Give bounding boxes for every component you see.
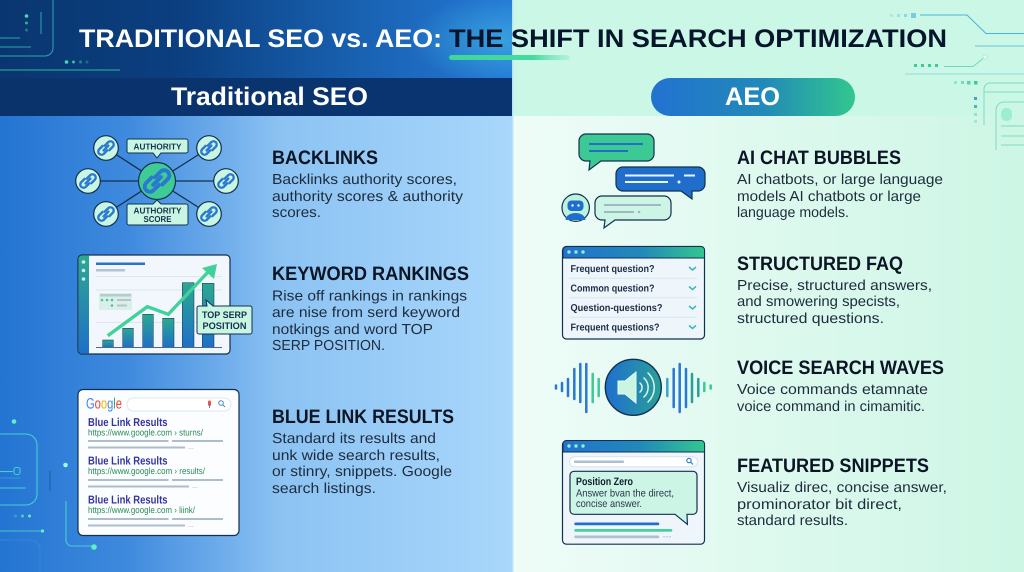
text: blue link results description xyxy=(272,431,452,497)
icon: link network: SCORE xyxy=(144,214,172,224)
text: AI chat description xyxy=(737,172,943,221)
text: featured snippets description: prominorator bit direct, xyxy=(737,497,902,513)
section: AI chat bubbles xyxy=(562,134,943,228)
icon: FAQ window: Common question? xyxy=(570,284,654,294)
text: blue link results description: Standard its results and xyxy=(272,431,436,447)
text: featured snippets description: standard results. xyxy=(737,513,848,529)
header: AEO pill: AEO xyxy=(725,83,780,111)
icon: search results page: Google xyxy=(86,396,122,412)
icon: FAQ window: Frequent questions? xyxy=(570,322,660,334)
heading: structured FAQ: STRUCTURED FAQ xyxy=(737,253,903,275)
icon: ranking chart: POSITION xyxy=(202,321,247,332)
icon: link network: AUTHORITY xyxy=(134,142,182,152)
icon: position zero window xyxy=(562,440,704,544)
left circuit decoration top xyxy=(0,0,120,95)
icon: search results page: https://www.google.com › liink/ xyxy=(88,505,195,515)
section: structured FAQ xyxy=(562,246,932,339)
icon: ranking chart: TOP SERP xyxy=(202,310,248,321)
text: backlinks description xyxy=(272,172,464,221)
section: featured snippets xyxy=(562,440,947,544)
right panel background xyxy=(512,0,1024,572)
heading: blue link results: BLUE LINK RESULTS xyxy=(272,406,454,428)
heading: keyword rankings: KEYWORD RANKINGS xyxy=(272,263,469,285)
title underline xyxy=(449,55,570,60)
icon: search results page: Blue Link Results xyxy=(88,494,168,506)
icon: search results page: ... xyxy=(188,522,194,529)
section: backlinks xyxy=(76,136,464,226)
icon: search results page: ... xyxy=(188,444,194,451)
icon: position zero window: Position Zero xyxy=(576,476,633,488)
icon: position zero window: concise answer. xyxy=(576,498,642,510)
text: structured FAQ description: and smowering specists, xyxy=(737,294,900,310)
text: structured FAQ description: Precise, structured answers, xyxy=(737,278,932,294)
heading: AI chat bubbles: AI CHAT BUBBLES xyxy=(737,147,901,169)
text: structured FAQ description: structured questions. xyxy=(737,311,884,327)
icon: link network xyxy=(76,136,238,226)
icon: search results page xyxy=(78,390,239,536)
header: Traditional SEO: Traditional SEO xyxy=(171,83,368,111)
icon: chat bubbles and robot xyxy=(562,134,705,228)
icon: search results page: Blue Link Results xyxy=(88,417,168,429)
header: Traditional SEO xyxy=(0,78,512,116)
icon: search results page: ... xyxy=(192,483,198,490)
heading: backlinks: BACKLINKS xyxy=(272,147,378,169)
icon: ranking chart xyxy=(78,255,252,354)
right circuit decoration xyxy=(890,13,1024,150)
text: keyword rankings description xyxy=(272,288,467,354)
icon: FAQ window: Frequent question? xyxy=(570,264,654,275)
header: AEO pill xyxy=(651,78,855,116)
text: voice search description xyxy=(737,382,928,415)
left circuit decoration bottom xyxy=(0,419,97,572)
section: blue link results xyxy=(78,390,454,536)
text: backlinks description: authority scores & authority xyxy=(272,189,464,205)
title: TRADITIONAL SEO vs. AEO: xyxy=(79,25,442,53)
text: keyword rankings description: SERP POSITION. xyxy=(272,338,385,354)
text: blue link results description: unk wide search results, xyxy=(272,448,440,464)
section: voice search waves xyxy=(556,357,944,415)
icon: speaker with sound waves xyxy=(556,359,711,415)
text: backlinks description: Backlinks authority scores, xyxy=(272,172,457,188)
title: THE SHIFT IN SEARCH OPTIMIZATION xyxy=(449,25,947,53)
text: keyword rankings description: notkings and word TOP xyxy=(272,322,433,338)
heading: voice search waves: VOICE SEARCH WAVES xyxy=(737,357,944,379)
text: keyword rankings description: are nise from serd keyword xyxy=(272,305,460,321)
icon: FAQ window xyxy=(562,246,704,339)
text: structured FAQ description xyxy=(737,278,932,327)
heading: featured snippets: FEATURED SNIPPETS xyxy=(737,455,929,477)
icon: search results page: https://www.google.com › sturns/ xyxy=(88,428,203,438)
text: keyword rankings description: Rise off rankings in rankings xyxy=(272,288,467,304)
icon: search results page: https://www.google.com › results/ xyxy=(88,466,205,476)
text: voice search description: Voice commands etamnate xyxy=(737,382,928,398)
text: blue link results description: or stinry, snippets. Google xyxy=(272,464,452,480)
title xyxy=(79,25,947,53)
icon: link network: AUTHORITY xyxy=(134,206,182,216)
text: featured snippets description xyxy=(737,480,947,529)
icon: position zero window: Answer bvan the direct, xyxy=(576,488,674,500)
icon: FAQ window: Question-questions? xyxy=(570,303,662,314)
text: voice search description: voice command in cimamitic. xyxy=(737,399,925,415)
text: blue link results description: search listings. xyxy=(272,481,376,497)
text: backlinks description: scores. xyxy=(272,205,321,221)
text: AI chat description: language models. xyxy=(737,205,849,221)
left panel background xyxy=(0,0,590,572)
text: featured snippets description: Visualiz direc, concise answer, xyxy=(737,480,947,496)
section: keyword rankings xyxy=(78,255,469,354)
text: AI chat description: models AI chatbots or large xyxy=(737,189,921,205)
icon: search results page: Blue Link Results xyxy=(88,456,168,468)
text: AI chat description: AI chatbots, or large language xyxy=(737,172,943,188)
